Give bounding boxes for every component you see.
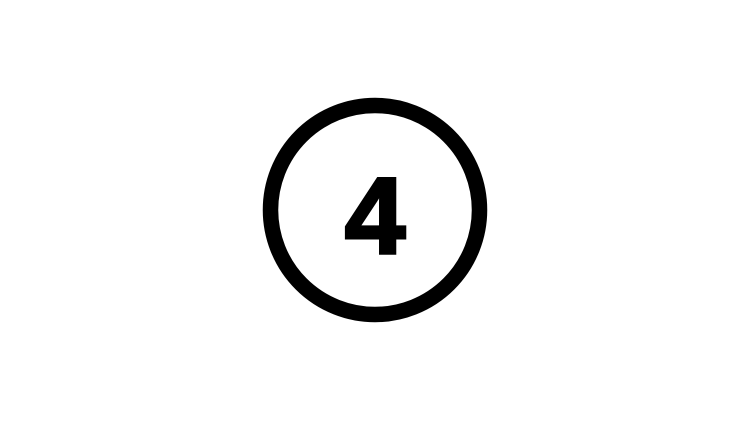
icon: circle outline [270, 106, 480, 314]
number label: 4 [345, 155, 406, 277]
